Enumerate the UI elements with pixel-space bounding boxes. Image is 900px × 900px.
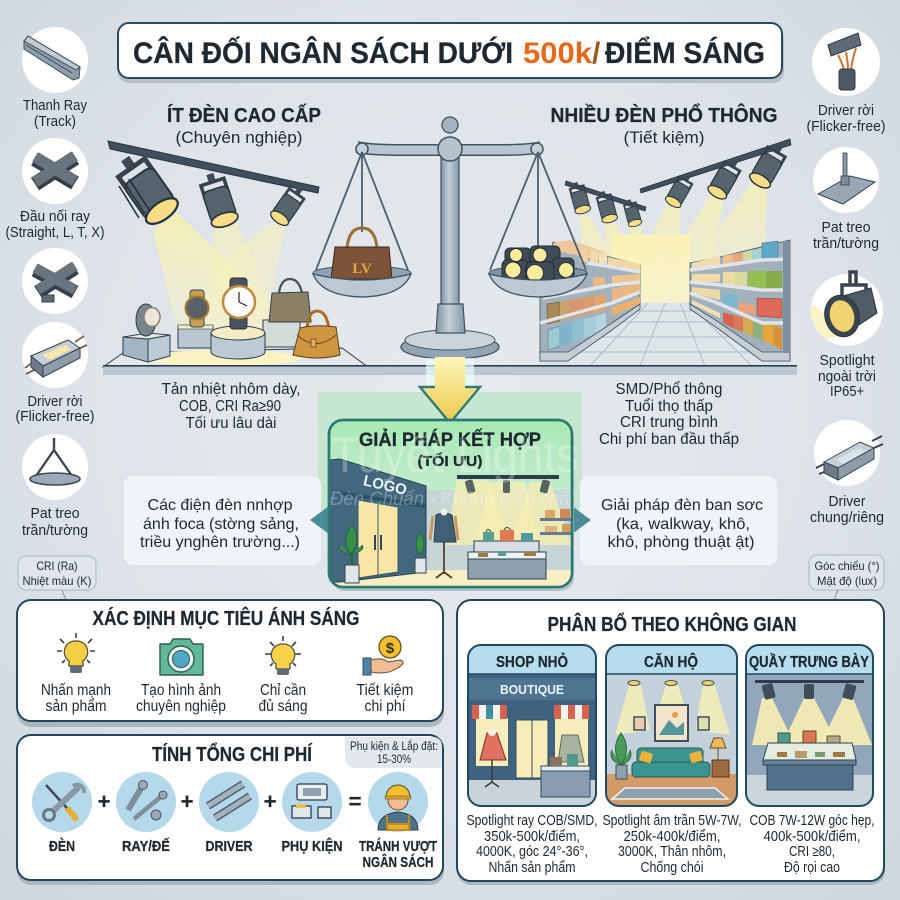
text: premium benefits: COB, CRI Ra≥90	[179, 398, 281, 415]
scale column	[436, 117, 465, 333]
text: standard traits: SMD/Phổ thông	[616, 381, 722, 398]
card: apartment: CĂN HỘ	[644, 652, 698, 671]
display table	[468, 528, 546, 579]
goal: save cost: $	[386, 640, 395, 657]
accessory: track rail: Thanh Ray	[23, 98, 88, 114]
side callout left	[124, 476, 321, 565]
accessory: rail connector: Đầu nối ray	[20, 209, 91, 225]
goal: save cost	[356, 636, 414, 715]
heading: premium few lights: ÍT ĐÈN CAO CẤP	[167, 104, 321, 127]
showcase	[763, 743, 856, 790]
track rails	[565, 139, 791, 211]
tag: beam angle: Góc chiếu (°)	[814, 559, 880, 573]
specs: small shop: 4000K, góc 24°-36°,	[476, 844, 588, 860]
aisle floor	[535, 303, 797, 366]
cost: lamp: ĐÈN	[49, 838, 75, 855]
goal: just enough light: đủ sáng	[258, 698, 308, 715]
accessory: outdoor spotlight: Spotlight	[820, 353, 874, 369]
accessory: hanging bracket: trần/tường	[22, 523, 88, 539]
ceiling track and lights	[755, 680, 864, 700]
wall art	[634, 705, 709, 741]
plus: +	[98, 789, 110, 814]
heading: premium few lights	[167, 104, 321, 147]
card: display counter: QUẦY TRƯNG BÀY	[749, 652, 869, 671]
track rail	[108, 141, 319, 193]
specs: display counter	[750, 813, 874, 876]
sofa	[632, 748, 710, 777]
heading: PHÂN BỔ THEO KHÔNG GIAN	[548, 612, 796, 636]
tag: beam angle	[809, 555, 884, 600]
text: standard traits: Tuổi thọ thấp	[625, 398, 713, 415]
goal: just enough light: Chỉ cần	[260, 682, 306, 699]
light haze	[579, 183, 767, 310]
card: small shop: BOUTIQUE	[500, 682, 564, 697]
goal: save cost: chi phí	[364, 698, 406, 715]
cost: lamp	[32, 772, 92, 855]
specs: apartment: Chống chói	[640, 860, 704, 876]
shelves left	[540, 240, 640, 361]
shop illustration	[329, 459, 575, 586]
goal: professional image: Tạo hình ảnh	[141, 682, 221, 699]
green watermark block	[318, 392, 582, 510]
panel: allocation by space	[457, 600, 885, 885]
tag: CRI	[18, 556, 96, 600]
heading: many standard lights: (Tiết kiệm)	[624, 129, 704, 147]
heading: many standard lights: NHIỀU ĐÈN PHỔ THÔNG	[550, 103, 778, 127]
display floor	[103, 348, 368, 367]
accessory: outdoor spotlight: IP65+	[830, 384, 864, 400]
accessory: driver: Driver rời	[28, 394, 82, 410]
text: premium benefits	[162, 381, 300, 432]
left pan with bag	[313, 152, 411, 297]
text: premium benefits: Tản nhiệt nhôm dày,	[162, 381, 300, 398]
plants	[339, 525, 426, 583]
goal: save cost: Tiết kiệm	[356, 682, 414, 699]
text: standard traits	[599, 381, 739, 448]
scale base	[401, 330, 499, 359]
accessory: outdoor spotlight	[811, 270, 883, 396]
accessory: outdoor spotlight: ngoài trời	[818, 369, 876, 385]
goods on case	[778, 731, 840, 743]
goal: just enough light	[258, 636, 308, 715]
accessory: shared driver: Driver	[828, 494, 866, 510]
arrow left	[310, 506, 329, 534]
red dress mannequin	[480, 728, 506, 787]
clothes and counter	[541, 735, 590, 797]
tag: accessories share	[345, 737, 442, 768]
specs: apartment: Spotlight âm trần 5W-7W,	[602, 813, 742, 829]
specs: display counter: COB 7W-12W góc hẹp,	[750, 813, 874, 829]
plus: +	[181, 789, 193, 814]
tag: accessories share: Phụ kiện & Lắp đặt:	[350, 740, 438, 753]
watermark	[330, 427, 579, 510]
text: standard traits: Chi phí ban đầu thấp	[599, 431, 739, 448]
heading: many standard lights	[550, 103, 778, 147]
plant and lamp	[611, 733, 729, 779]
accessory: track rail	[22, 27, 88, 130]
specs: display counter: 400k-500k/điểm,	[764, 829, 860, 845]
cost result: worker	[359, 772, 437, 871]
title banner: ĐIỂM SÁNG	[605, 36, 765, 70]
wall shelves	[540, 509, 572, 535]
scale arm	[356, 137, 543, 161]
accessory: ceiling plate: trần/tường	[813, 236, 879, 252]
accessory: driver connector: Driver rời	[818, 103, 874, 119]
goal: highlight products: sản phẩm	[46, 698, 106, 715]
cost: accessories	[282, 772, 342, 855]
shop illustration: LOGO	[362, 472, 409, 499]
side callout left: Các điện đèn nnhợp	[148, 497, 293, 514]
display cubes and pedestal	[123, 320, 300, 362]
accessory: driver	[16, 322, 94, 425]
cost: driver	[199, 772, 259, 855]
shelves right	[690, 240, 790, 361]
scene base line	[103, 365, 797, 375]
side callout left: triều ynghên trường...)	[140, 534, 300, 551]
scene: retail aisle with many lights	[535, 139, 797, 366]
scene: premium display with track lights	[103, 141, 368, 367]
specs: display counter: Độ rọi cao	[784, 860, 840, 876]
panel title: GIẢI PHÁP KẾT HỢP	[359, 429, 541, 451]
card: apartment	[606, 645, 737, 806]
title banner: 500k	[523, 37, 592, 70]
tag: beam angle: Mật độ (lux)	[817, 574, 877, 588]
light beams	[153, 213, 290, 345]
title banner: CÂN ĐỐI NGÂN SÁCH DƯỚI	[133, 36, 513, 70]
goal: highlight products: Nhấn mạnh	[41, 682, 111, 699]
heading: premium few lights: (Chuyên nghiệp)	[176, 129, 302, 147]
accessory: shared driver	[810, 420, 884, 526]
mini track	[457, 475, 559, 494]
goal: professional image	[136, 639, 226, 715]
handbags	[269, 279, 340, 358]
specs: small shop	[466, 813, 598, 876]
title banner	[118, 23, 784, 83]
accessory: hanging bracket: Pat treo	[30, 506, 80, 522]
right column: accessories	[807, 28, 885, 599]
card: display counter	[746, 645, 873, 806]
arrow right	[572, 506, 591, 534]
specs: apartment: 3000K, Thân nhôm,	[618, 844, 726, 860]
accessory: ceiling plate: Pat treo	[822, 220, 870, 236]
cost: accessories: PHỤ KIỆN	[282, 837, 342, 855]
tag: accessories share: 15-30%	[377, 754, 411, 766]
panel: lighting goals	[17, 600, 444, 727]
accessory: rail connector	[6, 138, 104, 241]
right pan with lamps	[489, 152, 587, 297]
accessory: driver connector: (Flicker-free)	[806, 119, 886, 135]
accessory: shared driver: chung/riêng	[810, 510, 884, 526]
accessory: driver: (Flicker-free)	[16, 409, 94, 425]
cost: rail and base	[116, 772, 176, 855]
side callout left: ánh foca (stờng sảng,	[143, 516, 299, 533]
specs: small shop: 350k-500k/điểm,	[484, 829, 580, 845]
title banner: /	[592, 37, 601, 70]
accessory: track rail: (Track)	[34, 114, 76, 130]
text: standard traits: CRI trung bình	[620, 414, 718, 431]
left pan with bag: LV	[352, 261, 372, 277]
mannequin	[430, 508, 458, 578]
card: small shop	[468, 645, 596, 806]
tag: CRI: CRI (Ra)	[36, 559, 78, 573]
side callout right	[580, 476, 777, 565]
panel: total cost	[17, 735, 444, 885]
shop windows	[476, 718, 588, 778]
accessory: connector parts	[22, 248, 88, 314]
ceiling lights	[615, 680, 730, 735]
panel: combined solution	[329, 420, 579, 591]
heading: TÍNH TỔNG CHI PHÍ	[152, 742, 312, 766]
specs: small shop: Nhấn sản phẩm	[488, 860, 576, 876]
side callout right: khô, phòng thuật ật)	[608, 534, 754, 551]
cost: driver: DRIVER	[206, 838, 253, 855]
light cones	[752, 698, 872, 745]
heading: XÁC ĐỊNH MỤC TIÊU ÁNH SÁNG	[92, 606, 360, 630]
card: small shop: SHOP NHỎ	[496, 652, 568, 671]
panel title: (TỐI ƯU)	[418, 452, 482, 470]
arrow down	[420, 357, 480, 423]
accessory: ceiling plate	[813, 147, 879, 252]
watches	[136, 278, 255, 336]
watermark: Tuyết Lights	[331, 427, 579, 483]
goal: highlight products	[41, 633, 111, 715]
panel title	[359, 429, 541, 470]
cost result: worker: TRÁNH VƯỢT	[359, 838, 437, 855]
text: premium benefits: Tối ưu lâu dài	[186, 415, 276, 432]
accessory: driver connector	[806, 28, 886, 135]
left column: accessories	[6, 27, 104, 600]
accessory: hanging bracket	[22, 434, 88, 539]
spotlights	[110, 148, 309, 230]
accessory: rail connector: (Straight, L, T, X)	[6, 225, 104, 241]
equals: =	[349, 789, 361, 814]
balance scale	[313, 117, 587, 359]
plus: +	[264, 789, 276, 814]
awnings	[472, 705, 589, 719]
cost result: worker: NGÂN SÁCH	[362, 853, 434, 871]
tag: CRI: Nhiệt màu (K)	[22, 574, 92, 588]
watermark: Đèn Chuẩn - Không gian chất	[330, 489, 576, 510]
specs: display counter: CRI ≥80,	[789, 844, 835, 860]
specs: small shop: Spotlight ray COB/SMD,	[466, 813, 598, 829]
side callout right: Giải pháp đèn ban sơc	[601, 497, 763, 514]
specs: apartment: 250k-400k/điểm,	[624, 829, 720, 845]
specs: apartment	[602, 813, 742, 876]
spotlights	[568, 140, 790, 228]
goal: professional image: chuyên nghiệp	[136, 698, 226, 715]
cost: rail and base: RAY/ĐẾ	[122, 838, 170, 855]
side callout right: (ka, walkway, khô,	[616, 516, 750, 533]
